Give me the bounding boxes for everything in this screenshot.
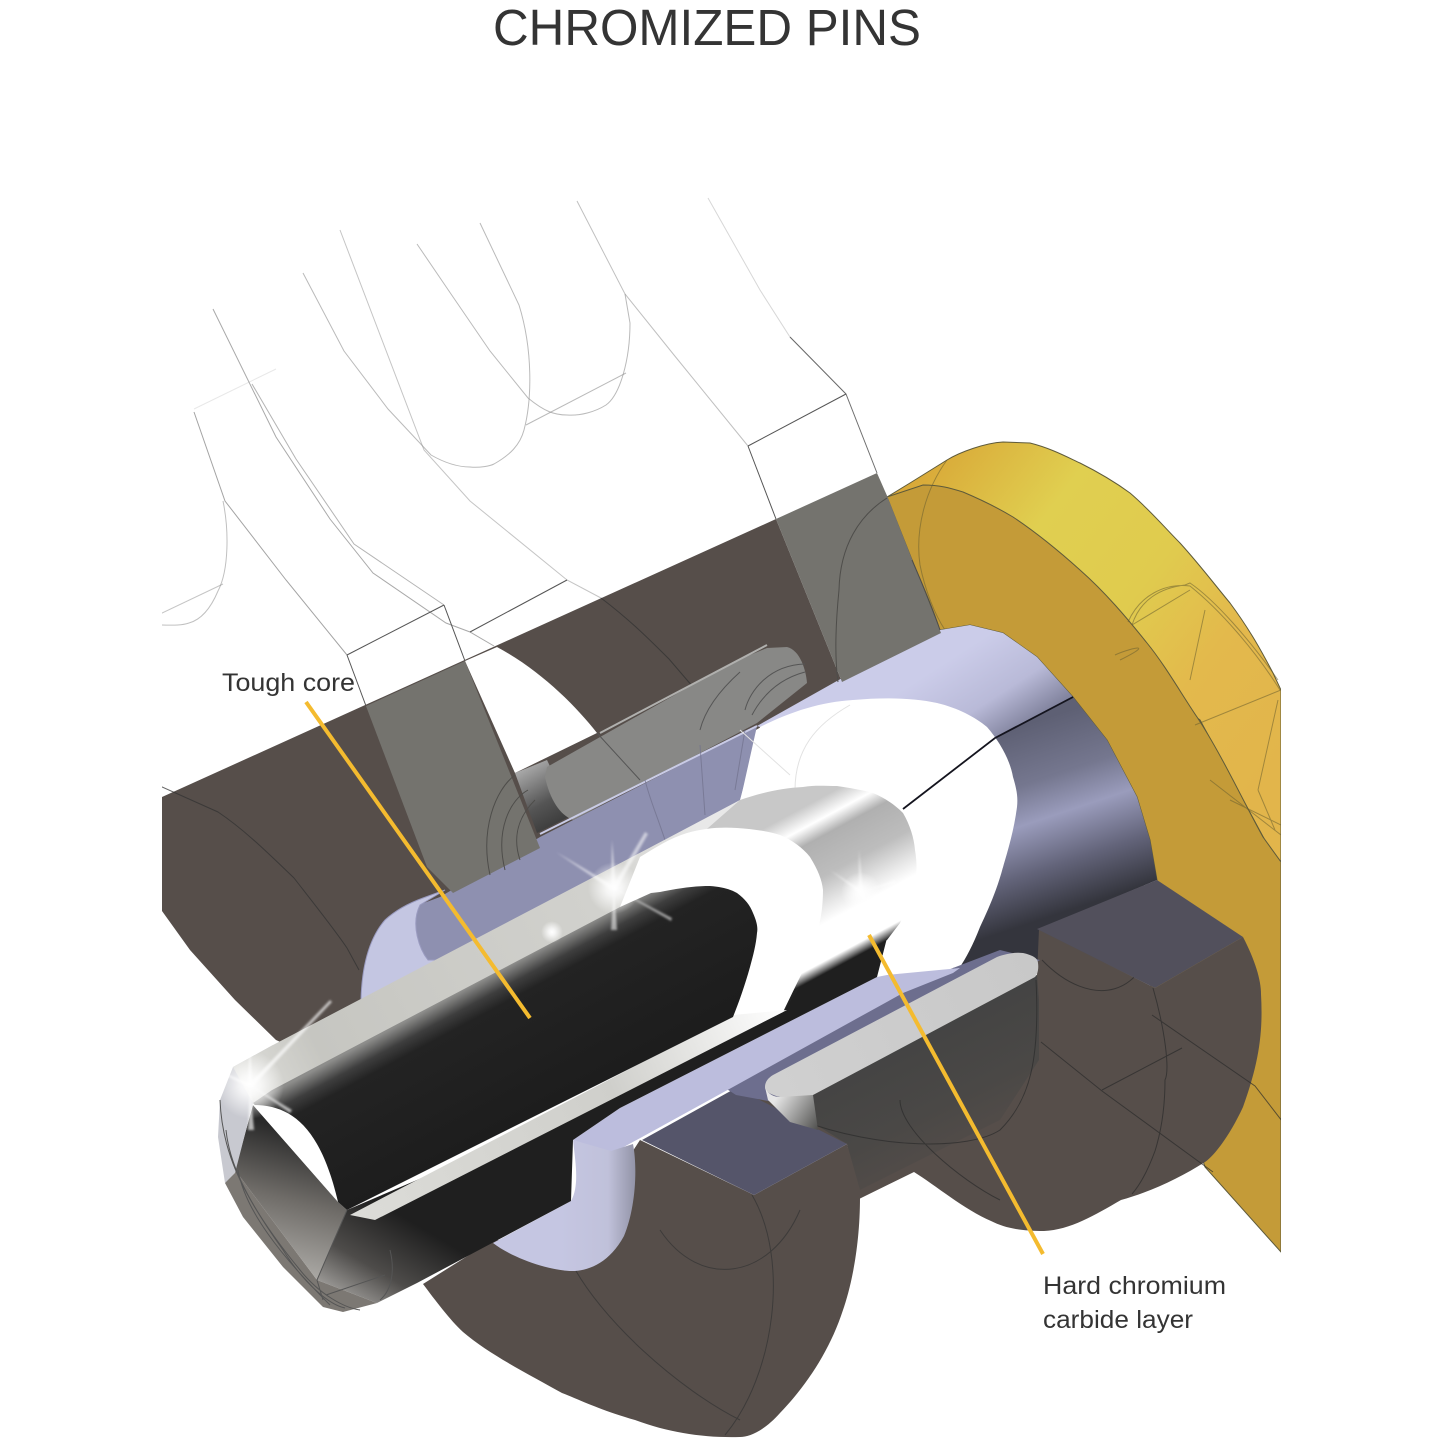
dark brown upper band	[162, 519, 842, 1060]
label: hard chromium carbide layer	[1043, 1272, 1226, 1334]
pillar right of link plate	[776, 473, 941, 682]
dark top face left	[642, 1088, 847, 1195]
grey slot lower	[765, 953, 1038, 1098]
bore wireframe	[740, 705, 850, 790]
faint wireframe of upper link plate	[160, 198, 877, 706]
white gap between pillars	[465, 647, 597, 773]
top silver band	[233, 800, 740, 1103]
sparkle small	[541, 921, 563, 943]
label: hard chromium carbide layer: Hard chromium	[1043, 1272, 1226, 1300]
grey slot upper	[545, 645, 807, 820]
lavender sleeve shadowed band	[416, 725, 758, 960]
sparkle on silver	[830, 850, 896, 912]
leader line: hard chromium layer	[869, 935, 1043, 1254]
pin end rim	[225, 1170, 377, 1312]
bushing dark cylinder	[950, 697, 1157, 975]
white crescent	[620, 828, 823, 1017]
right brown bulk	[757, 930, 1281, 1231]
disc wireframe	[919, 460, 1281, 835]
chain link cutaway illustration	[160, 198, 1282, 1437]
black core	[253, 886, 757, 1210]
pin body underside	[317, 938, 887, 1303]
sparkle mid pin	[556, 832, 672, 930]
lavender sleeve flange	[360, 890, 446, 1000]
brown band arc lines	[160, 598, 693, 970]
hook of lavender sleeve	[493, 1140, 635, 1271]
sparkle pin end	[195, 1000, 332, 1130]
dark central part	[813, 975, 1039, 1174]
shiny link pin recess	[515, 760, 573, 833]
white bore of pin end	[253, 1105, 338, 1202]
leader line: tough core	[306, 702, 530, 1018]
lower lavender strip	[573, 968, 960, 1154]
pin	[218, 786, 916, 1312]
pin end face	[235, 1105, 347, 1280]
thin black bushing seam	[903, 697, 1073, 809]
lavender sleeve upper light	[757, 625, 1073, 738]
title: CHROMIZED PINS	[493, 0, 921, 56]
disc inner face	[887, 485, 1281, 1252]
pin end wire lines	[220, 1100, 392, 1310]
slot end glow	[765, 1087, 818, 1130]
yellow sprocket disc	[887, 442, 1281, 1252]
lower bulk arcs	[570, 1195, 800, 1435]
pin end chamfer glass	[218, 1045, 273, 1183]
infographic canvas	[162, 9, 1281, 1438]
label: hard chromium carbide layer: carbide layer	[1043, 1306, 1193, 1334]
lavender shadow under slot	[722, 950, 1040, 1105]
pillar left of link plate	[366, 661, 540, 893]
silver outer crescent	[707, 786, 916, 1010]
disc outer rim	[887, 442, 1281, 870]
white bushing bore	[740, 698, 1017, 975]
dark top face right	[1037, 880, 1243, 988]
lower left brown bulk	[423, 1140, 860, 1437]
right bulk wireframe	[818, 960, 1281, 1200]
label: tough core: Tough core	[222, 669, 355, 697]
lower silver strip	[350, 1010, 787, 1220]
